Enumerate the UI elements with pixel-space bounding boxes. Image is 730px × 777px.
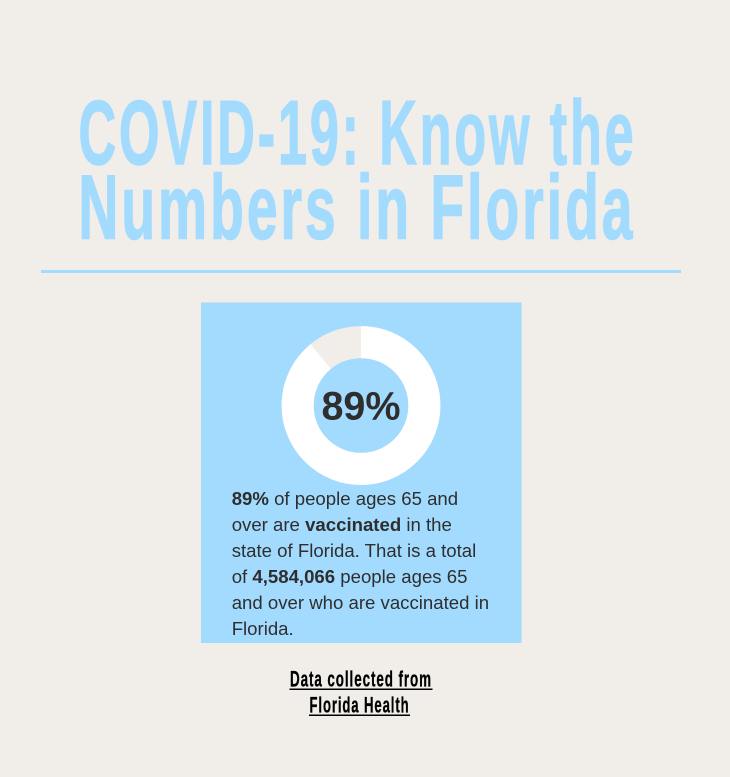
text block: description: state of Florida. That is a total bbox=[232, 540, 476, 561]
text block: description: 89% of people ages 65 and bbox=[232, 488, 458, 509]
panel: vaccination statistic bbox=[201, 302, 522, 643]
text block: description: and over who are vaccinated in bbox=[232, 592, 489, 613]
text block: description: of 4,584,066 people ages 65 bbox=[232, 566, 467, 587]
text block: description: Florida. bbox=[232, 618, 294, 639]
donut chart: 89 percent: 89% bbox=[321, 384, 401, 428]
text block: description: over are vaccinated in the bbox=[232, 514, 452, 535]
source note bbox=[290, 667, 432, 718]
text block: description bbox=[232, 488, 489, 639]
source note: Florida Health bbox=[310, 693, 410, 718]
source note: Data collected from bbox=[290, 667, 432, 692]
title bbox=[78, 83, 636, 258]
donut chart: 89 percent bbox=[298, 342, 424, 469]
